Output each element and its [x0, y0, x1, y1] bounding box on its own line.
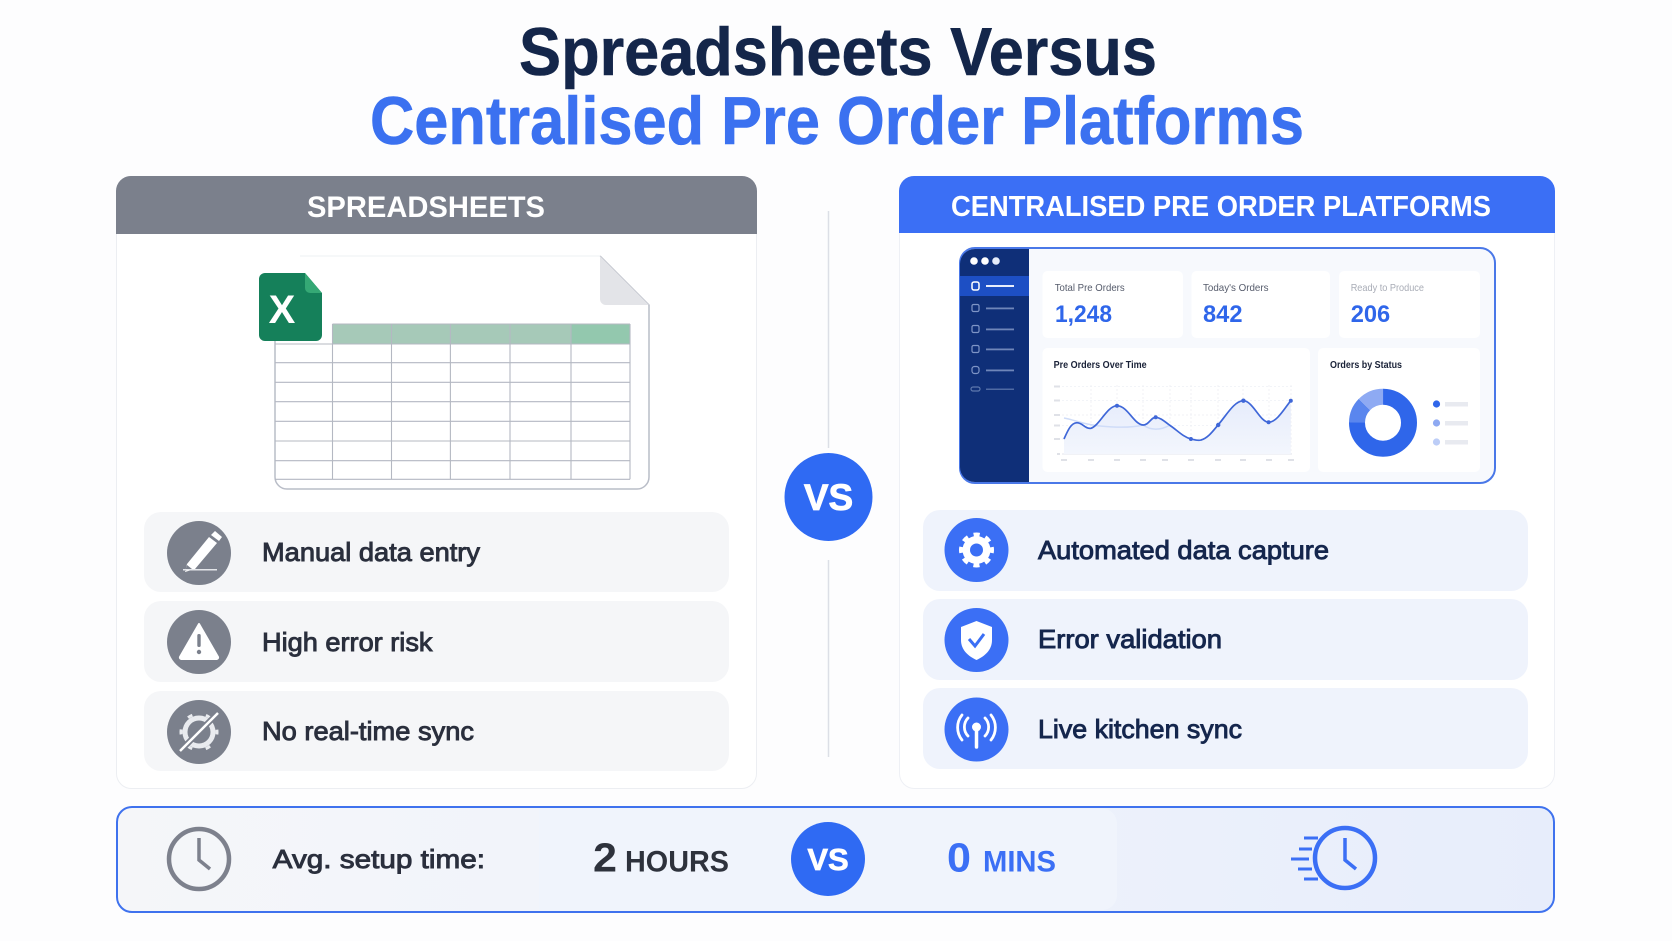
card: ready to produce: 206 — [1351, 301, 1390, 328]
icon: spreadsheet document — [259, 256, 649, 489]
icon: excel badge — [259, 273, 322, 341]
icon: warning triangle — [180, 624, 218, 659]
row: no real-time sync: No real-time sync — [262, 716, 474, 746]
chart: orders by status: Orders by Status — [1330, 360, 1402, 371]
row: automated data capture: Automated data capture — [1038, 535, 1329, 565]
bottom bar: average setup time — [117, 807, 1554, 912]
row: high error risk: High error risk — [262, 627, 434, 657]
divider: vertical line — [828, 211, 830, 757]
panel header: platforms: CENTRALISED PRE ORDER PLATFORMS — [951, 191, 1491, 223]
icon: sync disabled — [180, 713, 218, 751]
panel header: platforms — [899, 176, 1555, 233]
row: manual data entry — [144, 512, 729, 592]
chart: pre orders over time — [1042, 348, 1310, 472]
stat: 2 hours: 2 — [593, 835, 617, 881]
stat: 2 hours: HOURS — [625, 846, 729, 879]
stat: 0 mins: 0 — [947, 835, 971, 881]
panel header: spreadsheets: SPREADSHEETS — [307, 191, 545, 224]
icon: excel badge: X — [269, 288, 296, 332]
card: total pre orders: 1,248 — [1055, 301, 1112, 328]
stat: 0 mins — [947, 835, 1056, 881]
panel: spreadsheets — [116, 176, 757, 788]
stat: 0 mins: MINS — [983, 846, 1056, 879]
title: Spreadsheets Versus — [519, 14, 1157, 90]
icon: broadcast antenna — [958, 715, 995, 747]
stat: 2 hours — [593, 835, 729, 881]
panel header: spreadsheets — [116, 176, 757, 234]
dashboard mockup — [960, 248, 1495, 483]
sidebar — [960, 249, 1029, 482]
chart: orders by status — [1318, 348, 1480, 472]
icon: grey clock — [169, 829, 229, 889]
card: today's orders: 842 — [1203, 301, 1242, 328]
card: total pre orders: Total Pre Orders — [1055, 282, 1125, 294]
donut — [1357, 397, 1409, 449]
bottom bar: average setup time: Avg. setup time: — [273, 844, 485, 874]
row: live kitchen sync — [923, 688, 1528, 769]
row: high error risk — [144, 601, 729, 682]
card: today's orders: Today's Orders — [1203, 282, 1268, 294]
icon: shield check — [961, 621, 992, 660]
badge: small VS — [791, 822, 865, 896]
row: no real-time sync — [144, 691, 729, 771]
row: automated data capture — [923, 510, 1528, 591]
badge: small VS: VS — [807, 842, 849, 877]
title: Centralised Pre Order Platforms — [370, 83, 1304, 159]
row: error validation: Error validation — [1038, 624, 1222, 654]
row: manual data entry: Manual data entry — [262, 537, 480, 567]
icon: pencil — [183, 531, 222, 572]
card: ready to produce — [1339, 271, 1480, 338]
icon: fast clock — [1291, 828, 1375, 888]
card: total pre orders — [1042, 271, 1183, 338]
card: ready to produce: Ready to Produce — [1351, 282, 1424, 294]
title — [370, 14, 1304, 159]
row: live kitchen sync: Live kitchen sync — [1038, 714, 1242, 744]
chart: pre orders over time: Pre Orders Over Time — [1054, 360, 1147, 371]
badge: VS: VS — [804, 477, 853, 518]
row: error validation — [923, 599, 1528, 680]
panel: centralised pre order platforms — [899, 176, 1555, 788]
card: today's orders — [1192, 271, 1330, 338]
icon: gear — [962, 536, 990, 564]
badge: VS — [784, 453, 872, 541]
